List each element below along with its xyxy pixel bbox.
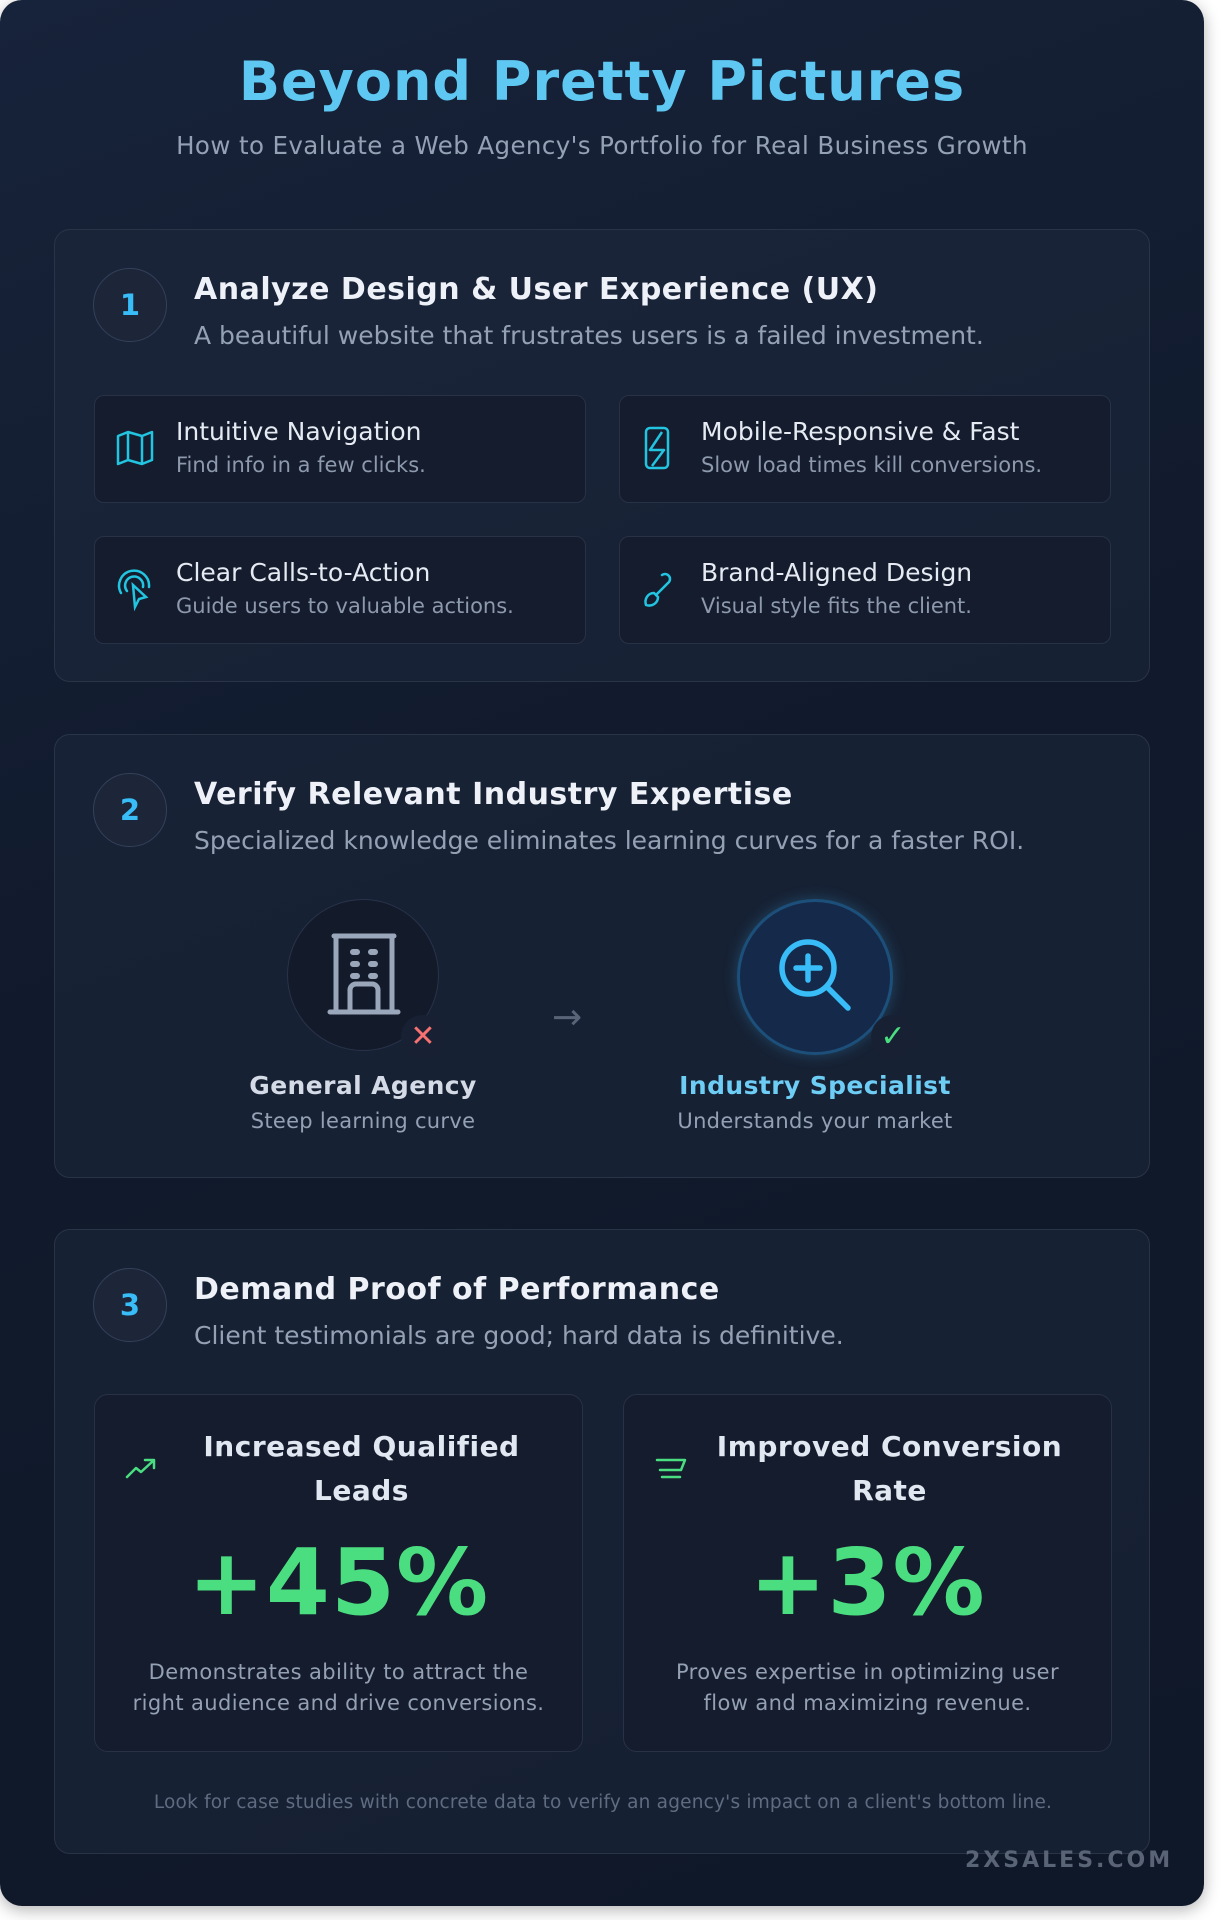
heading 3: Demand Proof of Performance [194,1272,720,1307]
industry specialist [677,894,953,1133]
industry specialist: Understands your market [677,1109,953,1133]
subheading 2: Specialized knowledge eliminates learning curves for a faster ROI. [194,826,1024,855]
label: Industry Specialist [679,1071,951,1100]
icon: red x badge [401,1015,445,1059]
panel: industry expertise [54,734,1150,1178]
item: brand aligned: Visual style fits the client. [701,594,972,618]
icon: funnel [656,1458,686,1478]
icon: magnifier circle [737,899,893,1055]
stat card: leads: +45% [188,1529,489,1636]
item: brand aligned [619,536,1111,644]
subheading 3: Client testimonials are good; hard data is definitive. [194,1321,844,1350]
panel: proof of performance [54,1229,1150,1854]
item: brand aligned: Brand-Aligned Design [701,558,972,587]
title: Beyond Pretty Pictures [239,50,965,113]
number badge 2: 2 [120,793,140,827]
stat card: leads: Leads [314,1474,409,1507]
stat card: leads [94,1394,583,1752]
item: mobile responsive: Slow load times kill conversions. [701,453,1042,477]
stat card: conversion: Improved Conversion [717,1430,1062,1463]
item: clear CTAs: Guide users to valuable actions. [176,594,514,618]
icon: green check badge: ✓ [880,1019,906,1054]
stat card: conversion: Proves expertise in optimizing user [676,1660,1059,1684]
arrow: → [552,997,582,1038]
item: intuitive navigation [94,395,586,503]
stat card: leads: Increased Qualified [203,1430,520,1463]
footnote: Look for case studies with concrete data to verify an agency's impact on a client's bottom line. [154,1792,1052,1813]
number badge 3 [93,1268,167,1342]
icon: green check badge [871,1015,915,1059]
item: intuitive navigation: Find info in a few clicks. [176,453,426,477]
item: mobile responsive: Mobile-Responsive & Fast [701,417,1019,446]
stat card: conversion: +3% [749,1529,986,1636]
subtitle: How to Evaluate a Web Agency's Portfolio for Real Business Growth [176,131,1028,160]
number badge 1: 1 [120,288,140,322]
item: clear CTAs [94,536,586,644]
item: intuitive navigation: Intuitive Navigation [176,417,422,446]
icon: trend up [126,1458,156,1478]
general agency: Steep learning curve [251,1109,475,1133]
stat card: conversion: Rate [852,1474,927,1507]
number badge 3: 3 [120,1288,140,1322]
icon: click target [118,569,150,611]
number badge 2 [93,773,167,847]
item: clear CTAs: Clear Calls-to-Action [176,558,430,587]
panel: design & UX [54,229,1150,682]
stat card: conversion [623,1394,1112,1752]
stat card: leads: right audience and drive conversions. [133,1691,544,1715]
number badge 1 [93,268,167,342]
subheading 1: A beautiful website that frustrates users is a failed investment. [194,321,984,350]
watermark: 2XSALES.COM [965,1848,1173,1873]
icon: brush [644,572,672,607]
item: mobile responsive [619,395,1111,503]
stat card: conversion: flow and maximizing revenue. [703,1691,1032,1715]
general agency [249,899,477,1133]
icon: map [116,430,154,466]
heading 1: Analyze Design & User Experience (UX) [194,272,878,307]
icon: building circle [287,899,439,1051]
stat card: leads: Demonstrates ability to attract the [149,1660,528,1684]
icon: phone bolt [644,426,670,470]
label: General Agency [249,1071,477,1100]
icon: red x badge: ✕ [410,1019,436,1054]
heading 2: Verify Relevant Industry Expertise [194,777,793,812]
